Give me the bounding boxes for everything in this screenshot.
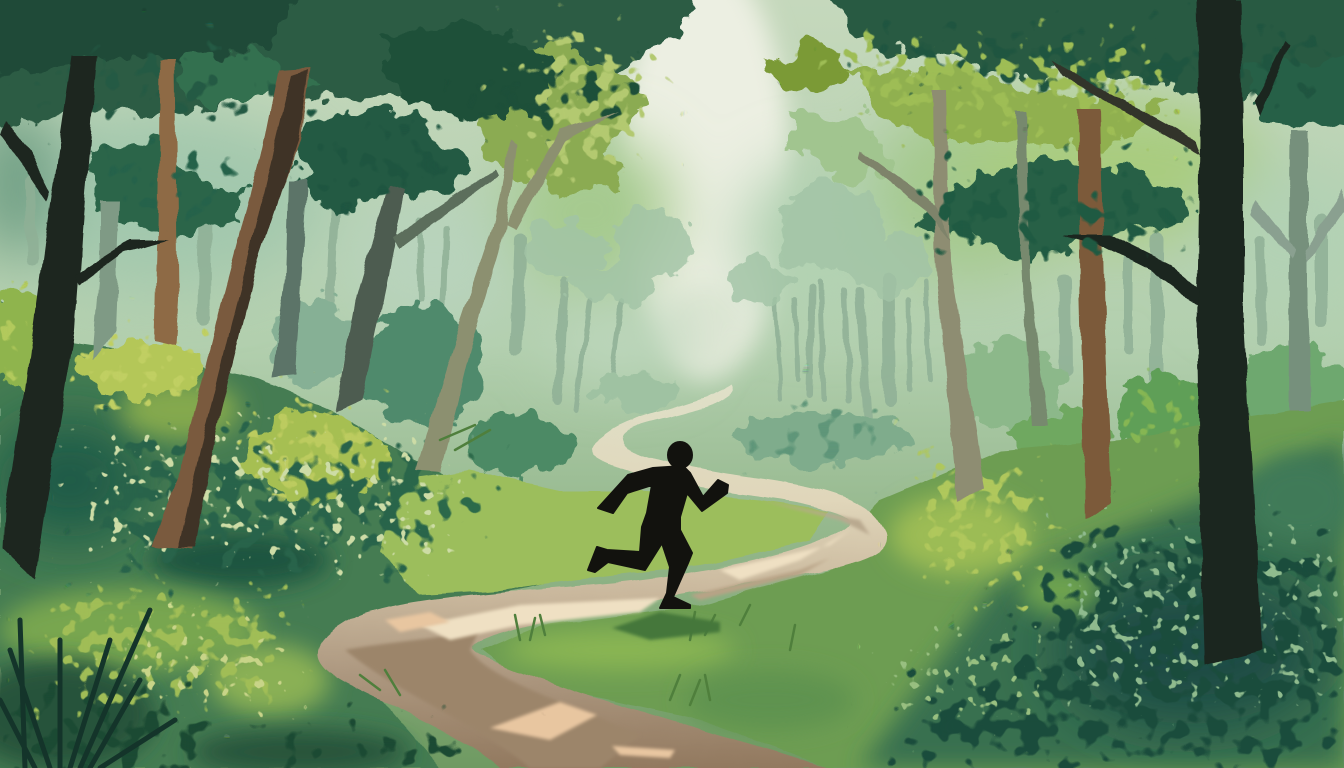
- distant pale tree trunks: [30, 180, 1322, 420]
- runner shadow: [612, 612, 720, 640]
- top-left dark canopy: [0, 0, 700, 235]
- misty distant foliage: [0, 100, 1344, 380]
- foliage overlapping trunks: [110, 135, 1180, 245]
- dappled leaves: yellow-green highlights: [0, 40, 1190, 700]
- path shading strokes: [345, 500, 870, 768]
- right trunks: [858, 0, 1344, 665]
- mid-distance tree crowns: [525, 180, 932, 304]
- dappled leaves: dark over canopy: [20, 30, 1320, 130]
- top-right dark canopy: [765, 0, 1344, 258]
- large left trunks: [0, 55, 618, 580]
- dappled leaves: pale flecks: [90, 440, 1344, 720]
- left forest floor: [0, 285, 585, 768]
- right forest floor: [480, 400, 1344, 768]
- fern: bottom-left: [0, 610, 175, 768]
- dappled leaves: dark foliage on forest floor: [0, 415, 1344, 768]
- silhouette of runner: [588, 442, 728, 608]
- path highlights: [420, 530, 850, 640]
- path warm patches: [385, 612, 675, 758]
- central green meadow: [380, 470, 828, 595]
- mid-ground shrubs: [270, 298, 1344, 473]
- winding path: [318, 385, 887, 768]
- pale sky opening: [620, 0, 790, 380]
- grass tufts: [360, 425, 795, 705]
